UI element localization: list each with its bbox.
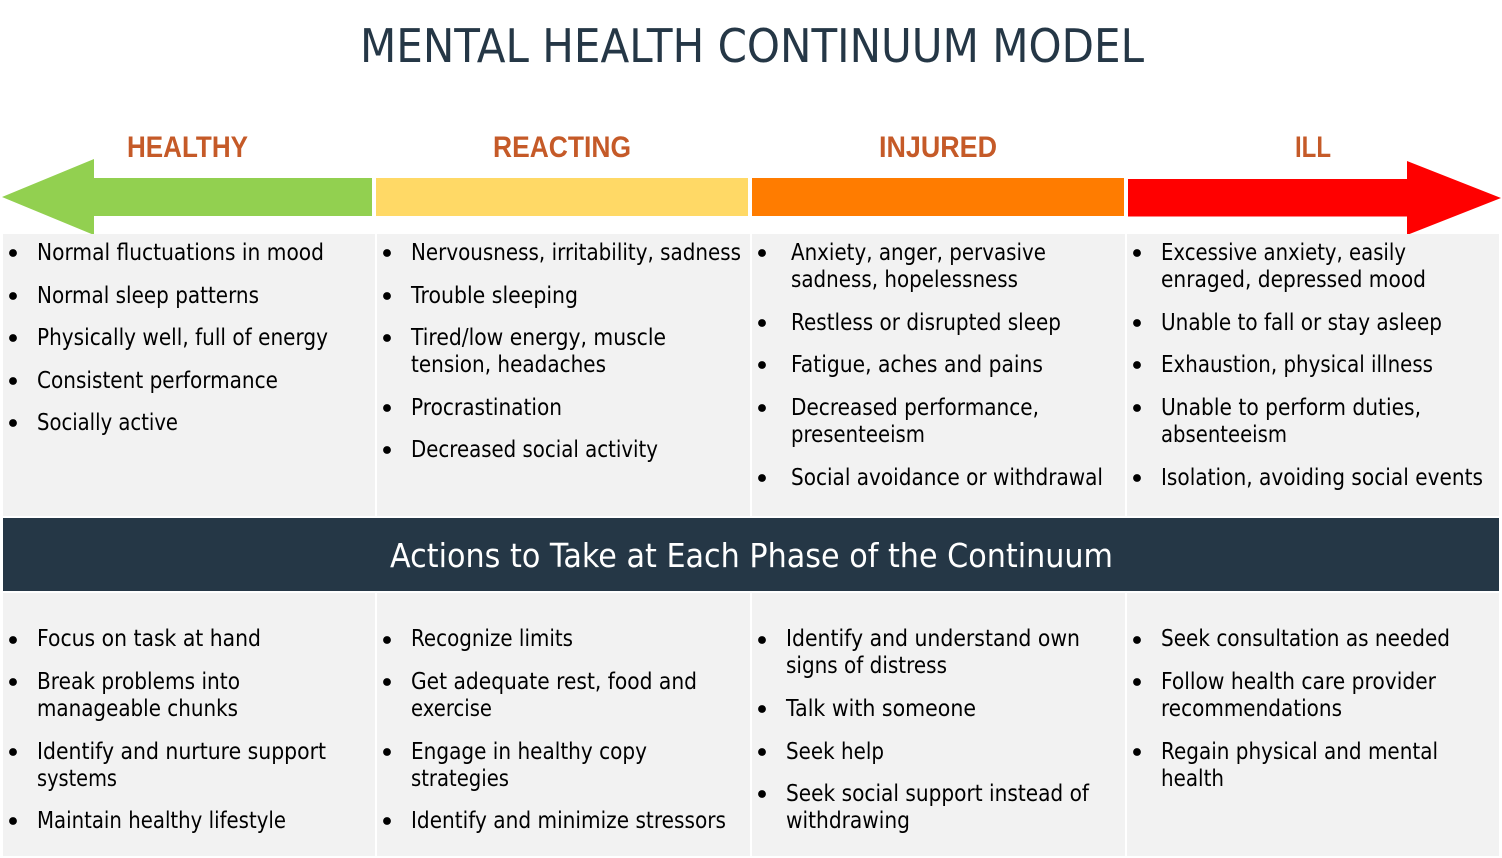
item (1133, 395, 1421, 448)
item: systems (37, 766, 117, 792)
item: Seek social support instead of (786, 781, 1090, 807)
item: Trouble sleeping (410, 283, 578, 309)
heading: injured: INJURED (879, 131, 997, 164)
item (1133, 240, 1426, 293)
item (1133, 669, 1436, 722)
item: withdrawing (786, 808, 910, 834)
item: Socially active (37, 410, 178, 436)
item: Identify and nurture support (37, 739, 326, 765)
item: Identify and understand own (786, 626, 1080, 652)
item: presenteeism (791, 422, 925, 448)
heading: ill: ILL (1295, 131, 1331, 164)
item: Tired/low energy, muscle (410, 325, 666, 351)
banner: actions heading: Actions to Take at Each Phase of the Continuum (390, 536, 1113, 575)
item: recommendations (1161, 696, 1342, 722)
panel: reacting symptoms (377, 234, 750, 516)
item: strategies (411, 766, 509, 792)
item: Anxiety, anger, pervasive (791, 240, 1046, 266)
item (758, 739, 884, 765)
item: exercise (411, 696, 492, 722)
item: Exhaustion, physical illness (1161, 352, 1433, 378)
item: Restless or disrupted sleep (791, 310, 1061, 336)
item: Maintain healthy lifestyle (37, 808, 286, 834)
heading: reacting: REACTING (493, 131, 631, 164)
panel: injured symptoms (752, 234, 1125, 516)
bar: yellow reacting (376, 178, 748, 216)
item (383, 325, 666, 378)
item: Physically well, full of energy (37, 325, 328, 351)
title: MENTAL HEALTH CONTINUUM MODEL (360, 19, 1144, 73)
panel: injured actions (752, 593, 1125, 856)
item: Normal sleep patterns (37, 283, 259, 309)
item: Seek consultation as needed (1161, 626, 1450, 652)
item: sadness, hopelessness (791, 267, 1018, 293)
panel: reacting actions (377, 593, 750, 856)
item: health (1161, 766, 1224, 792)
panel: ill symptoms (1127, 234, 1499, 516)
banner: actions heading (3, 518, 1499, 591)
item: Regain physical and mental (1161, 739, 1438, 765)
item: Excessive anxiety, easily (1161, 240, 1406, 266)
item: signs of distress (786, 653, 947, 679)
panel: healthy actions (3, 593, 375, 856)
item: Decreased performance, (791, 395, 1039, 421)
item (758, 781, 1090, 834)
bar: orange injured (752, 178, 1124, 216)
panel: ill actions (1127, 593, 1499, 856)
item: manageable chunks (37, 696, 238, 722)
item (758, 395, 1039, 448)
item: tension, headaches (411, 352, 606, 378)
item: Talk with someone (785, 696, 976, 722)
item: Follow health care provider (1161, 669, 1436, 695)
item: Get adequate rest, food and (411, 669, 697, 695)
item: Focus on task at hand (37, 626, 261, 652)
item (383, 739, 647, 792)
heading: healthy: HEALTHY (127, 131, 248, 164)
item: Unable to fall or stay asleep (1161, 310, 1442, 336)
item: Nervousness, irritability, sadness (411, 240, 741, 266)
item: Consistent performance (37, 368, 278, 394)
item (383, 669, 697, 722)
arrow: green healthy left arrow (2, 159, 372, 235)
item (9, 739, 326, 792)
item: Social avoidance or withdrawal (791, 465, 1103, 491)
item (758, 626, 1080, 679)
item: absenteeism (1161, 422, 1287, 448)
item (1133, 739, 1438, 792)
item: Decreased social activity (411, 437, 658, 463)
item: Fatigue, aches and pains (791, 352, 1043, 378)
item: Procrastination (411, 395, 562, 421)
item: Seek help (786, 739, 884, 765)
item: Normal fluctuations in mood (37, 240, 324, 266)
item: Identify and minimize stressors (411, 808, 726, 834)
item: Unable to perform duties, (1161, 395, 1421, 421)
item: Recognize limits (411, 626, 573, 652)
item (9, 669, 240, 722)
item: Engage in healthy copy (411, 739, 647, 765)
item: enraged, depressed mood (1161, 267, 1426, 293)
panel: healthy symptoms (3, 234, 375, 516)
item: Break problems into (37, 669, 240, 695)
item (758, 240, 1046, 293)
arrow: red ill right arrow (1128, 161, 1501, 235)
